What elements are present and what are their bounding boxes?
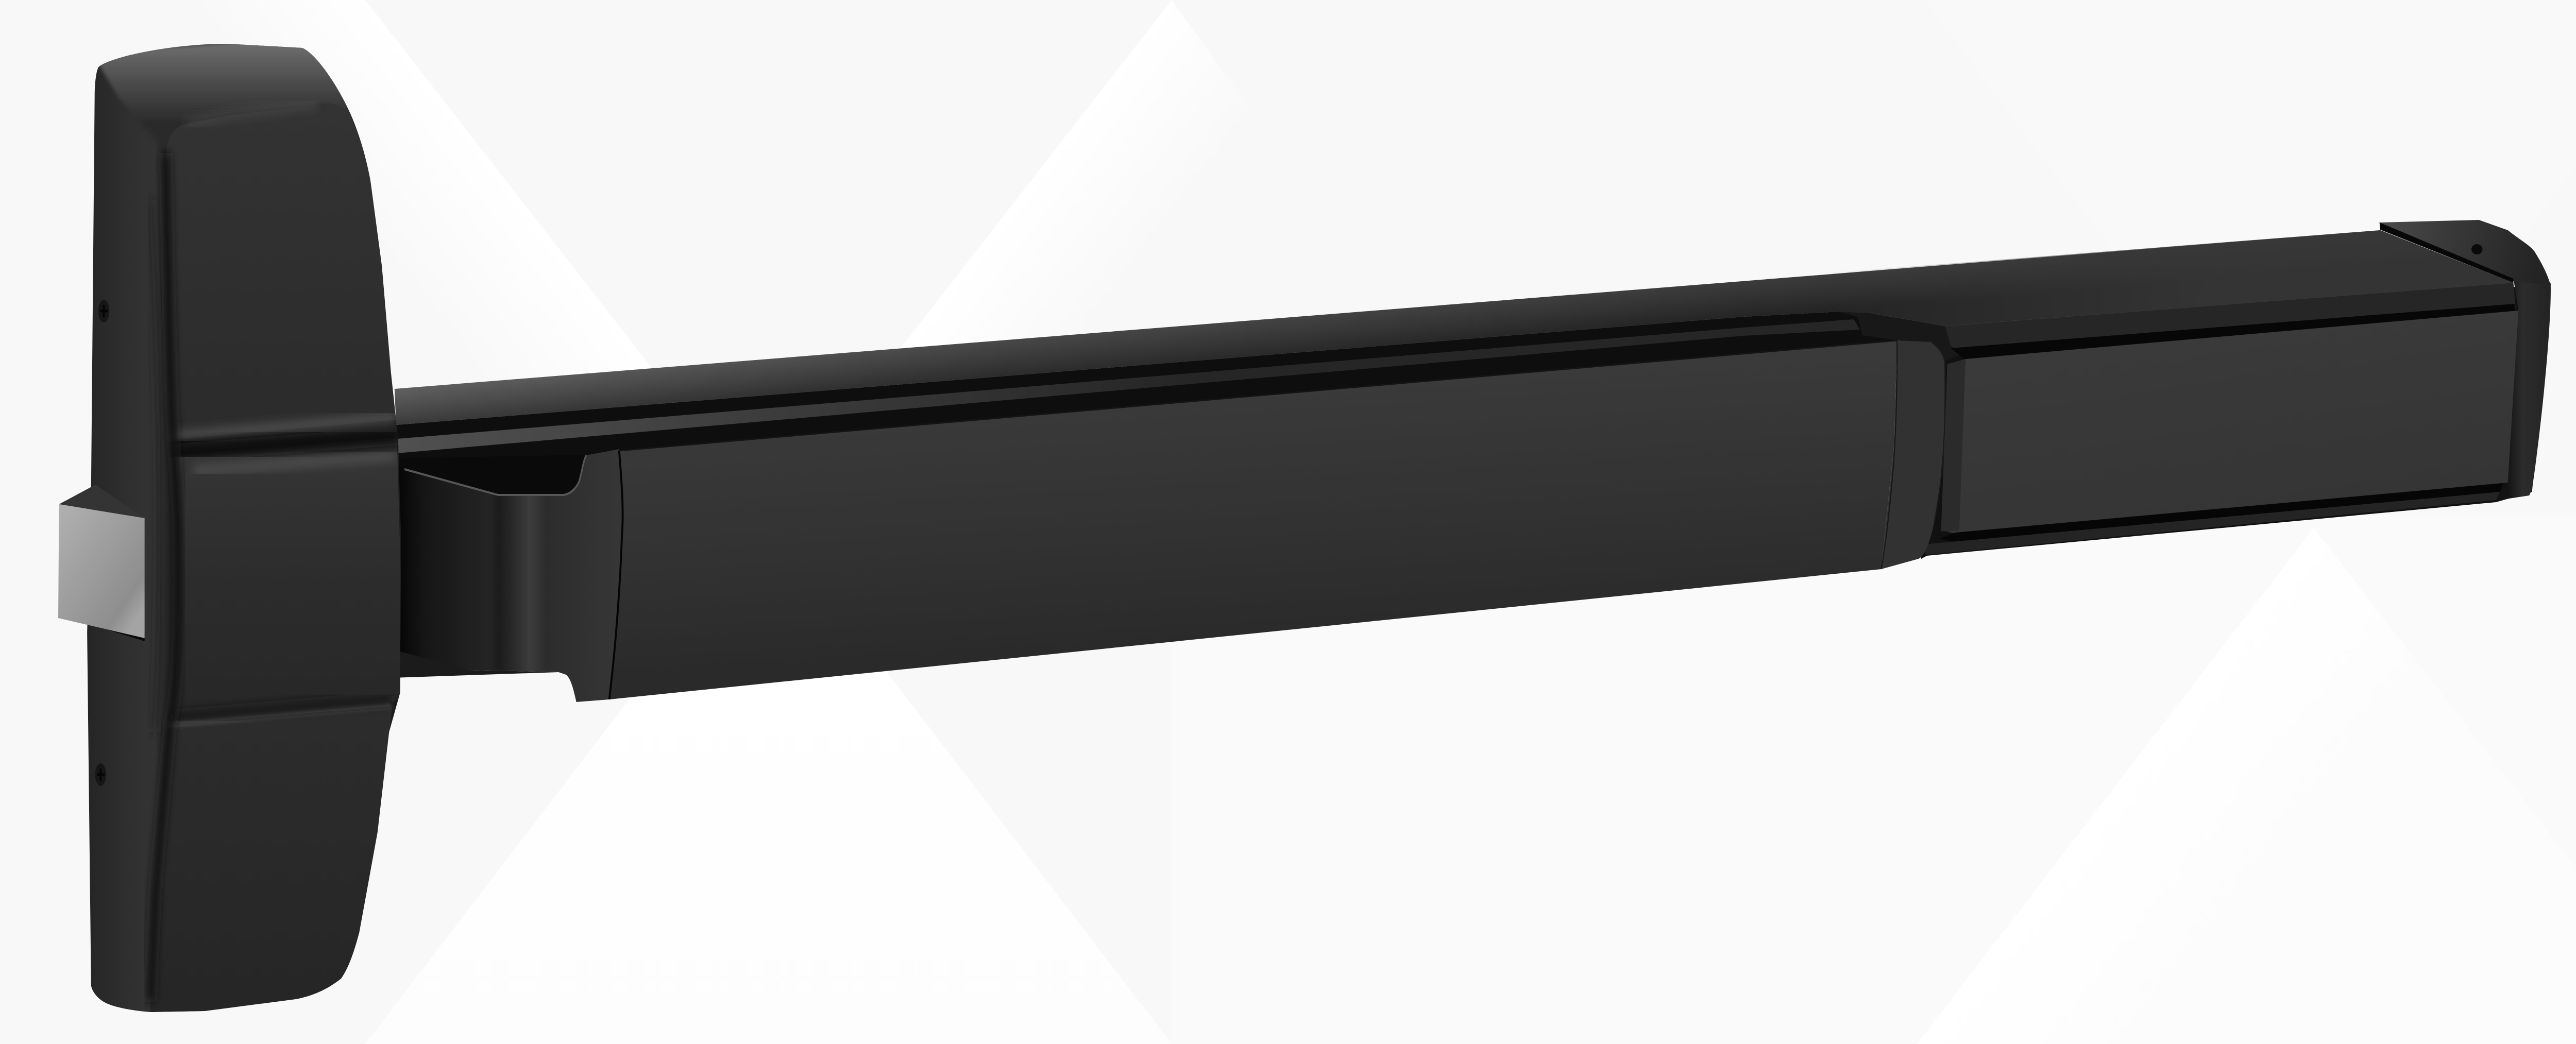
lock head xyxy=(58,31,404,1017)
bar: top surface of channel xyxy=(395,230,2514,425)
latch bolt xyxy=(58,485,145,641)
lock head: top bevel xyxy=(99,44,354,138)
bar assembly xyxy=(392,220,2551,702)
bar: top mounting plate xyxy=(2380,220,2551,285)
bar: end section face panel xyxy=(1943,311,2519,534)
lock head: lower panel xyxy=(150,708,392,1017)
bar: dark gap beneath rail xyxy=(392,438,619,497)
lock head: middle panel xyxy=(177,441,401,708)
lock head: groove shadow and highlights xyxy=(150,105,400,1002)
bar: lower rail xyxy=(1923,492,2500,555)
bar: case transition cap xyxy=(1881,340,1945,569)
icon: upper screw xyxy=(98,300,109,322)
bar: panel left edge xyxy=(1941,360,1965,532)
bar: connector highlight edge xyxy=(404,455,586,495)
lock head: silhouette xyxy=(87,44,401,1012)
bar: lower rail black slot xyxy=(1939,483,2503,542)
bar: dark backing of end section xyxy=(1893,284,2551,559)
bar: seam lines xyxy=(609,340,1945,699)
bar: front rail with grooves xyxy=(396,312,1959,458)
bar: dark shadow line under upper band xyxy=(1951,304,2515,360)
bar: rear rail stub under the connector xyxy=(392,646,558,678)
bar: end section upper band xyxy=(1945,283,2516,351)
icon: lower screw xyxy=(95,763,106,786)
bar: connector stub xyxy=(394,449,622,702)
bar: main touch-pad case xyxy=(609,340,1897,699)
bar: end cap xyxy=(2496,278,2551,501)
bar: plate shadow edge xyxy=(2380,223,2514,283)
icon: plate screw hole xyxy=(2471,244,2483,254)
lock head: upper panel xyxy=(166,104,396,439)
